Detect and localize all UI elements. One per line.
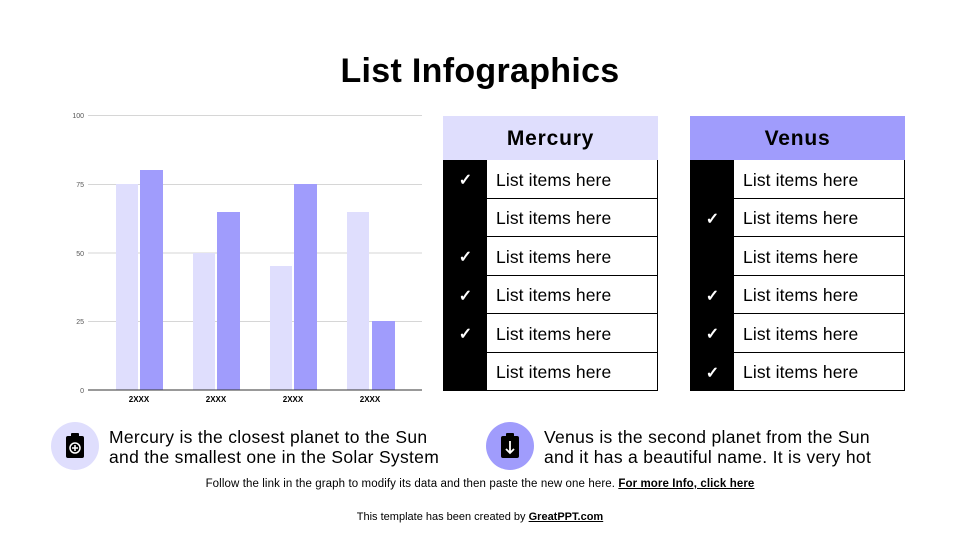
bar chart: 50 bbox=[76, 251, 84, 258]
title: List Infographics bbox=[340, 52, 620, 90]
icon: clipboard plus bbox=[51, 422, 99, 470]
credit: This template has been created by GreatPPT.com bbox=[357, 511, 603, 523]
table: Venus: List items here bbox=[743, 208, 858, 228]
bar chart: 100 bbox=[72, 113, 84, 120]
table: Mercury: ✓ bbox=[459, 288, 472, 305]
header: Mercury: Mercury bbox=[507, 127, 594, 150]
table: Mercury: ✓ bbox=[459, 249, 472, 266]
table: Mercury: List items here bbox=[496, 208, 611, 228]
table: Mercury: List items here bbox=[496, 285, 611, 305]
text: Venus description: and it has a beautiful name. It is very hot bbox=[544, 447, 871, 467]
table: Venus: List items here bbox=[743, 170, 858, 190]
bar chart: 25 bbox=[76, 319, 84, 326]
table: Venus: ✓ bbox=[706, 288, 719, 305]
table: Venus bbox=[690, 116, 905, 391]
header: Venus bbox=[690, 116, 905, 160]
text: Mercury description: and the smallest one in the Solar System bbox=[109, 447, 439, 467]
bar chart bbox=[72, 113, 422, 404]
text: Mercury description bbox=[109, 427, 439, 467]
header: Venus: Venus bbox=[765, 127, 830, 150]
footer note: Follow the link in the graph to modify its data and then paste the new one here. For more Info, click here bbox=[206, 478, 754, 490]
table: Venus: ✓ bbox=[706, 326, 719, 343]
table: Mercury: ✓ bbox=[459, 172, 472, 189]
bar chart: 75 bbox=[76, 182, 84, 189]
table: Mercury: List items here bbox=[496, 247, 611, 267]
table: Mercury: ✓ bbox=[459, 326, 472, 343]
table: Venus: List items here bbox=[743, 362, 858, 382]
table: Mercury: List items here bbox=[496, 324, 611, 344]
bar chart: 2XXX bbox=[206, 395, 227, 404]
table: Venus: ✓ bbox=[706, 365, 719, 382]
bar chart: 0 bbox=[80, 388, 84, 395]
table: Venus: List items here bbox=[743, 324, 858, 344]
table: Venus: ✓ bbox=[706, 211, 719, 228]
header: Mercury bbox=[443, 116, 658, 160]
text: Mercury description: Mercury is the closest planet to the Sun bbox=[109, 427, 427, 447]
icon: clipboard arrow bbox=[486, 422, 534, 470]
table: Mercury: List items here bbox=[496, 362, 611, 382]
table: Mercury bbox=[443, 116, 658, 391]
text: Venus description: Venus is the second planet from the Sun bbox=[544, 427, 870, 447]
table: Venus: List items here bbox=[743, 285, 858, 305]
bar chart: 2XXX bbox=[283, 395, 304, 404]
bar chart: 2XXX bbox=[129, 395, 150, 404]
text: Venus description bbox=[544, 427, 871, 467]
table: Venus: List items here bbox=[743, 247, 858, 267]
table: Mercury: List items here bbox=[496, 170, 611, 190]
bar chart: 2XXX bbox=[360, 395, 381, 404]
